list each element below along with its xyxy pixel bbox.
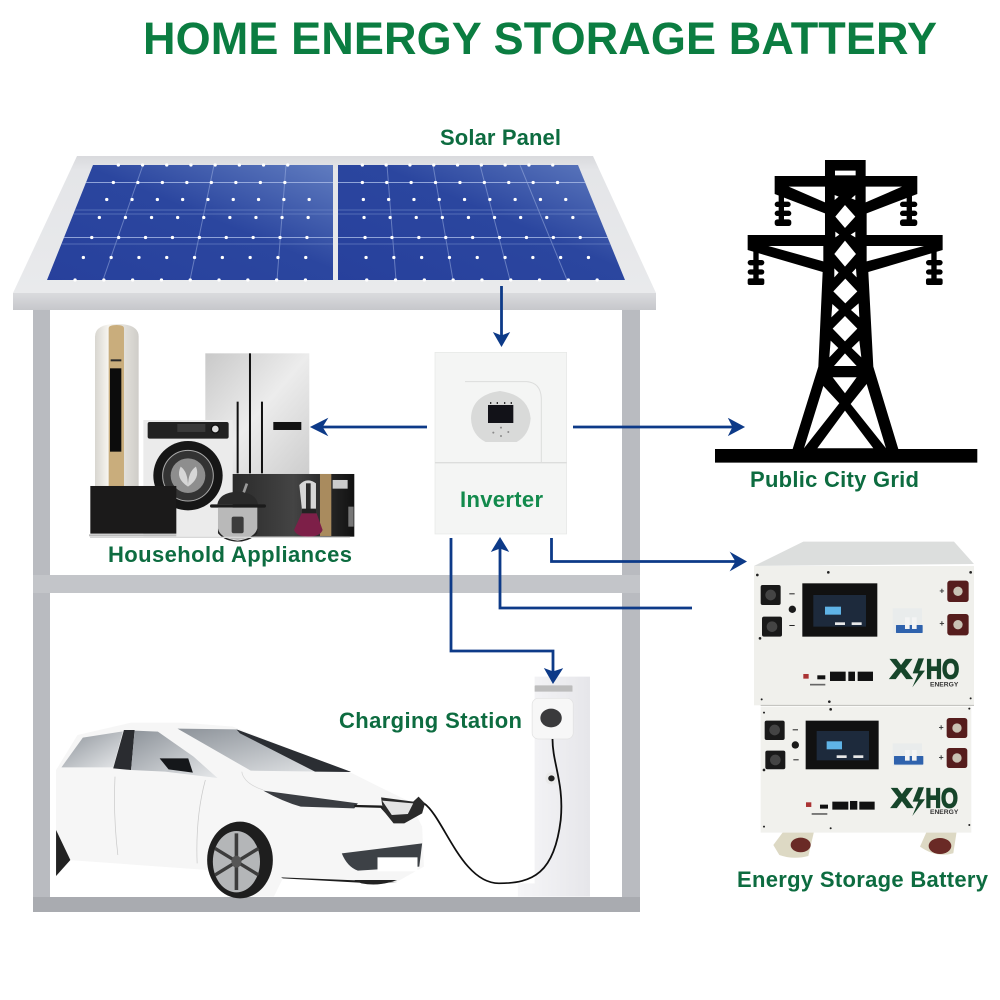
blender bbox=[294, 480, 323, 537]
caster wheels bbox=[773, 832, 957, 858]
logo: ENERGY bbox=[930, 682, 959, 689]
arrow: inverter to public grid bbox=[573, 419, 744, 435]
label: inverter: Inverter bbox=[460, 487, 543, 512]
logo: X bbox=[890, 653, 912, 684]
washing machine bbox=[143, 420, 233, 537]
arrow: inverter to appliances bbox=[311, 419, 427, 435]
door lines bbox=[115, 777, 205, 863]
car body bbox=[56, 723, 424, 897]
arrow: solar panel to inverter bbox=[494, 286, 509, 346]
label: household appliances: Household Appliances bbox=[108, 542, 352, 567]
logo: HO bbox=[926, 653, 959, 684]
label: public city grid: Public City Grid bbox=[750, 467, 919, 492]
label: charging station: Charging Station bbox=[339, 708, 522, 733]
label: energy storage battery: Energy Storage Battery bbox=[737, 867, 989, 892]
inverter bbox=[435, 352, 567, 534]
charging post bbox=[518, 677, 590, 897]
arrow: inverter to charging station bbox=[451, 538, 562, 683]
title: HOME ENERGY STORAGE BATTERY bbox=[143, 13, 937, 64]
panel: left bbox=[47, 164, 333, 282]
battery module: lower: + bbox=[939, 752, 944, 762]
solar panels bbox=[40, 160, 630, 285]
insulators bbox=[748, 194, 943, 285]
battery module: upper bbox=[754, 566, 974, 705]
logo bbox=[890, 653, 959, 689]
logo: HO bbox=[925, 783, 958, 814]
fridge bbox=[205, 353, 309, 475]
logo: X bbox=[891, 783, 913, 814]
rice cooker bbox=[210, 483, 266, 542]
logo bbox=[891, 783, 959, 816]
arrows bbox=[311, 286, 746, 683]
charging plug and cable bbox=[381, 739, 561, 883]
microwave bbox=[233, 474, 354, 537]
air conditioner bbox=[95, 324, 139, 487]
logo: ENERGY bbox=[930, 809, 959, 816]
battery module: lower bbox=[761, 707, 971, 833]
panel: right bbox=[335, 160, 630, 285]
battery module: upper: + bbox=[939, 585, 944, 595]
inverter display bbox=[471, 391, 531, 442]
energy storage battery unit bbox=[754, 542, 974, 858]
roof bbox=[13, 156, 656, 310]
arrow: battery to inverter bbox=[492, 538, 692, 608]
battery module: lower: + bbox=[939, 722, 944, 732]
electric car illustration bbox=[56, 677, 590, 898]
arrow: inverter to battery bbox=[552, 538, 746, 570]
household appliances illustration bbox=[89, 324, 354, 542]
label: solar panel: Solar Panel bbox=[440, 125, 561, 150]
wheel bbox=[207, 822, 273, 898]
power tower icon bbox=[715, 160, 977, 463]
television bbox=[89, 486, 176, 536]
house frame bbox=[13, 156, 656, 912]
battery top bbox=[754, 542, 974, 566]
battery module: upper: + bbox=[939, 618, 944, 628]
